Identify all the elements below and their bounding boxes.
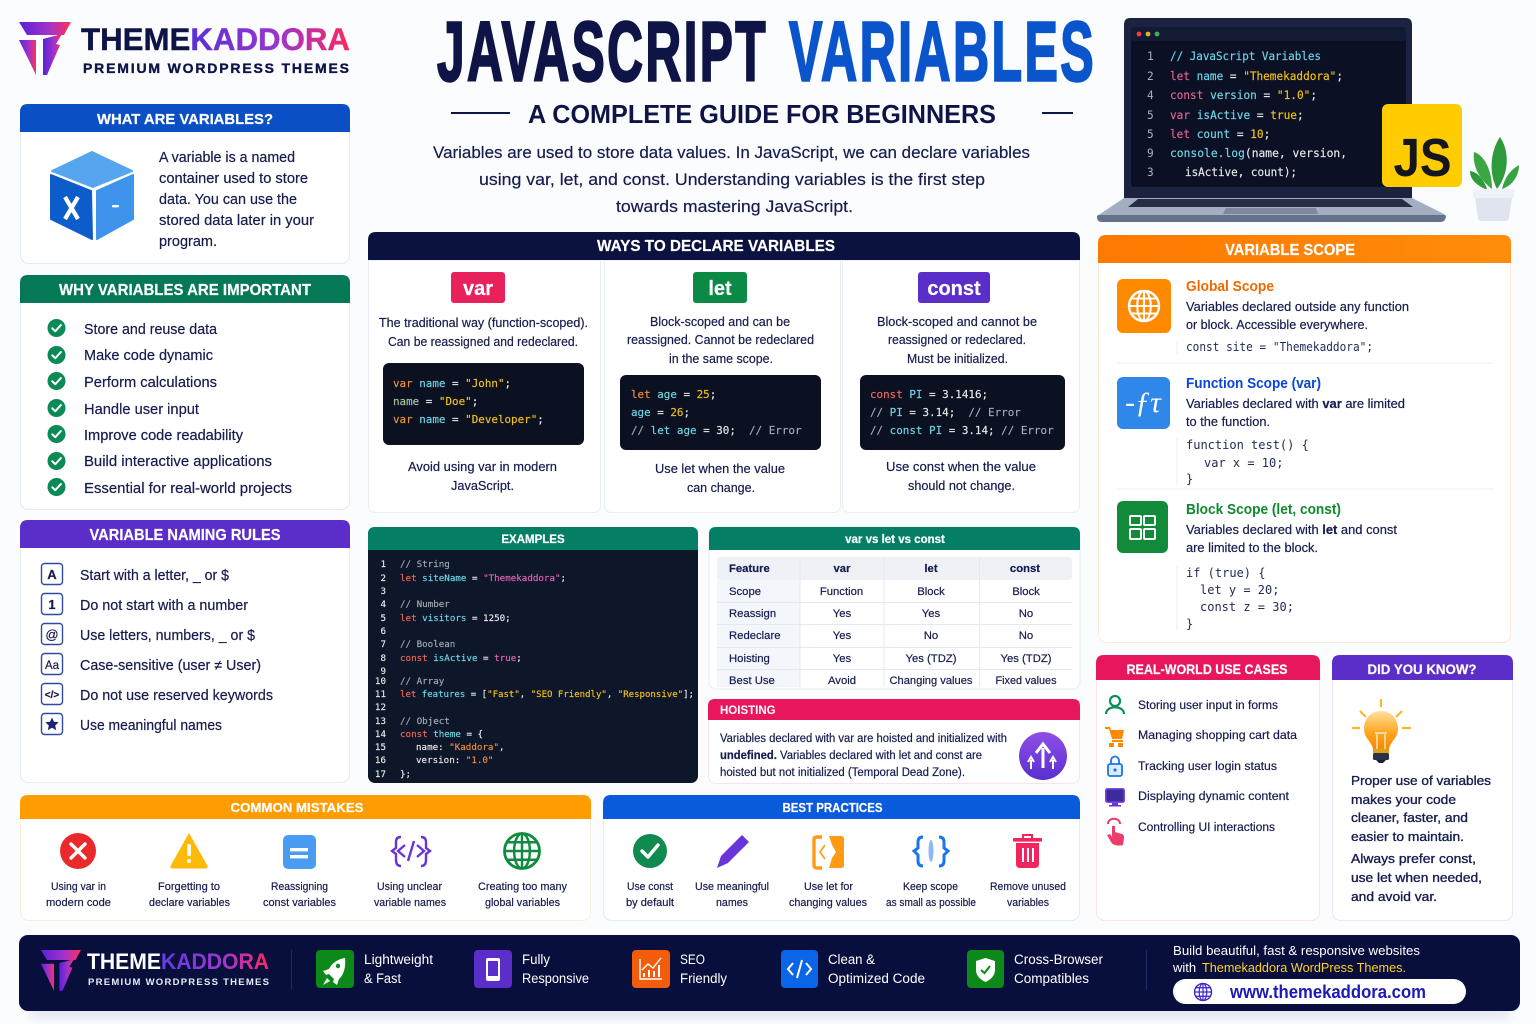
panel: variable scope [1098, 235, 1511, 642]
did you know text: easier to maintain. [1351, 829, 1464, 844]
scope: global [1117, 279, 1409, 354]
examples line numbers: 5 [380, 613, 386, 624]
comparison table: const [1010, 563, 1040, 575]
icon: user [1106, 696, 1124, 714]
scope: block: let y = 20; [1200, 583, 1279, 597]
examples code: name: "Kaddora", [416, 742, 505, 753]
code block: let: // let age = 30; // Error [631, 424, 802, 437]
did you know text: cleaner, faster, and [1351, 810, 1468, 825]
common mistakes labels: Using var in [51, 881, 106, 893]
scope: global: Global Scope [1186, 279, 1274, 295]
hoisting text: hoisted but not initialized (Temporal Dead Zone). [720, 767, 965, 779]
examples line numbers: 10 [375, 676, 386, 687]
logo wordmark: THEMEKADDORA [81, 21, 350, 57]
card: let [604, 260, 840, 512]
examples line numbers: 3 [380, 586, 386, 597]
heading: real-world use cases: REAL-WORLD USE CASES [1126, 661, 1288, 677]
scope: function: var x = 10; [1204, 456, 1283, 470]
examples line numbers: 13 [375, 716, 386, 727]
website pill [1173, 979, 1466, 1004]
scope: function: Variables declared with var are limited [1186, 396, 1405, 411]
icon: variable cube [51, 152, 133, 239]
icon: monitor [1106, 789, 1124, 806]
code block: const [860, 375, 1065, 450]
naming rule list: Do not start with a number [80, 598, 248, 614]
naming rule icons [42, 564, 62, 734]
did you know text [1351, 773, 1491, 904]
use case list: Controlling UI interactions [1138, 820, 1275, 834]
icon: red x [60, 833, 96, 869]
heading: best practices: BEST PRACTICES [782, 800, 883, 815]
best practices labels: as small as possible [886, 897, 976, 909]
feature: fully responsive [474, 950, 589, 988]
code block: var: name = "Doe"; [393, 395, 478, 408]
feature: clean code: Clean & [828, 952, 875, 967]
panel: what are variables [20, 104, 350, 264]
laptop code text: 5 [1147, 109, 1154, 122]
examples code: let features = ["Fast", "SEO Friendly", "Responsive"]; [400, 689, 694, 700]
scope: global: or block. Accessible everywhere. [1186, 317, 1368, 332]
card: var: JavaScript. [451, 478, 514, 493]
comparison table: Yes [833, 608, 852, 620]
footer banner [19, 935, 1520, 1011]
panel: common mistakes [20, 795, 591, 920]
icon: trash can [1013, 835, 1042, 868]
panel: ways to declare variables [368, 232, 1080, 512]
feature: lightweight and fast: & Fast [364, 971, 401, 986]
comparison table: var [834, 563, 851, 575]
card: let: can change. [687, 480, 755, 495]
scope: block: if (true) { [1186, 566, 1265, 580]
icon: equals square [283, 835, 316, 869]
definition text: stored data later in your [159, 213, 314, 229]
laptop illustration with code [1097, 18, 1446, 222]
examples line numbers: 1 [380, 559, 386, 570]
card: let: let [708, 278, 732, 300]
icon: lock [1108, 756, 1122, 776]
comparison table: Reassign [729, 608, 776, 620]
code block: var: var name = "John"; [393, 377, 511, 390]
icon: orange code file [814, 836, 844, 868]
heading: did you know [1332, 655, 1513, 680]
laptop code text: console.log(name, version, [1170, 147, 1347, 160]
comparison table: Yes [833, 630, 852, 642]
scope: block: are limited to the block. [1186, 540, 1318, 555]
did you know text: use let when needed, [1351, 870, 1482, 885]
code block: let: let age = 25; [631, 388, 716, 401]
best practices labels: names [716, 897, 748, 909]
card: var: Can be reassigned and redeclared. [388, 334, 578, 349]
scope: function: Function Scope (var) [1186, 376, 1321, 392]
call to action: Themekaddora WordPress Themes. [1202, 960, 1406, 975]
naming rule icon glyphs: A [47, 567, 57, 582]
heading: why variables are important [20, 275, 350, 303]
comparison table: Block [1012, 586, 1040, 598]
naming rule list: Do not use reserved keywords [80, 688, 273, 704]
examples line numbers: 7 [380, 639, 386, 650]
card: let: in the same scope. [669, 351, 773, 366]
heading: variable naming rules [20, 520, 350, 548]
feature: fully responsive: Responsive [522, 971, 589, 986]
feature: fully responsive: Fully [522, 952, 550, 967]
examples code: // Array [400, 676, 445, 687]
examples code: // Number [400, 599, 450, 610]
panel: did you know [1332, 655, 1513, 920]
icon: hoisting arrows [1019, 732, 1067, 780]
intro paragraph [433, 143, 1030, 216]
code block: const: const PI = 3.1416; [870, 388, 988, 401]
heading: what are variables [20, 104, 350, 132]
best practices labels [626, 881, 1066, 909]
heading: examples [368, 527, 698, 550]
did you know text: Proper use of variables [1351, 773, 1491, 788]
code block: var [383, 363, 584, 445]
feature: clean code: Optimized Code [828, 971, 925, 986]
comparison table: No [1019, 630, 1033, 642]
naming rule list [80, 568, 273, 734]
scope: global: const site = "Themekaddora"; [1186, 340, 1373, 354]
scope: function: function test() { [1186, 438, 1309, 452]
naming rule list: Start with a letter, _ or $ [80, 568, 229, 584]
best practices labels: Use const [627, 881, 674, 893]
naming rule icon glyphs [45, 567, 60, 701]
feature: cross-browser: Compatibles [1014, 971, 1089, 986]
checklist: Improve code readability [84, 428, 244, 444]
intro paragraph: using var, let, and const. Understanding variables is the first step [479, 170, 985, 189]
icon: pencil [717, 835, 749, 868]
laptop code text: isActive, count); [1185, 166, 1297, 179]
definition text: data. You can use the [159, 192, 297, 208]
icon: light bulb [1352, 699, 1411, 763]
naming rule list: Use meaningful names [80, 718, 222, 734]
heading: variable scope: VARIABLE SCOPE [1225, 242, 1355, 259]
examples code: }; [400, 769, 411, 780]
card: const: const [927, 278, 981, 300]
heading: hoisting: HOISTING [720, 705, 776, 717]
card: var: var [463, 278, 493, 300]
best practices labels: by default [626, 897, 675, 909]
examples line numbers: 2 [380, 573, 386, 584]
heading: ways to declare [368, 232, 1080, 260]
scope: block [1117, 501, 1397, 631]
scope: function: } [1186, 472, 1193, 486]
best practices labels: Remove unused [990, 881, 1066, 893]
footer logo: PREMIUM WORDPRESS THEMES [88, 977, 269, 988]
logo: Themekaddora header [19, 21, 350, 76]
comparison table: Feature [729, 563, 770, 575]
title: JAVASCRIPT [437, 4, 768, 98]
feature: seo friendly: SEO [680, 952, 705, 967]
card: const [842, 260, 1080, 512]
best practices labels: Use meaningful [695, 881, 769, 893]
common mistakes labels: declare variables [149, 897, 230, 909]
card: var [368, 260, 600, 512]
feature: cross-browser: Cross-Browser [1014, 952, 1103, 967]
scope: block: Block Scope (let, const) [1186, 502, 1341, 518]
common mistakes labels: Reassigning [271, 881, 328, 893]
examples code [400, 559, 694, 780]
icon: warning triangle [171, 834, 207, 868]
naming rule icon glyphs: @ [45, 627, 59, 642]
heading: common mistakes: COMMON MISTAKES [230, 800, 364, 815]
footer logo [41, 949, 269, 991]
code block: const: // const PI = 3.14; // Error [870, 424, 1054, 437]
icon: potted plant [1470, 137, 1519, 221]
examples line numbers: 8 [380, 653, 386, 664]
heading: common mistakes [20, 795, 591, 819]
comparison table: Fixed values [996, 675, 1057, 687]
examples code: // String [400, 559, 450, 570]
heading: what are variables: WHAT ARE VARIABLES? [97, 111, 273, 128]
examples line numbers: 16 [375, 755, 386, 766]
checklist: Handle user input [84, 402, 199, 418]
panel: examples code [368, 527, 698, 783]
heading: comparison: var vs let vs const [845, 534, 945, 546]
laptop code text: 5 [1147, 128, 1154, 141]
examples code: // Object [400, 716, 450, 727]
code block: let: age = 26; [631, 406, 690, 419]
heading: comparison [709, 527, 1080, 550]
comparison table: No [1019, 608, 1033, 620]
laptop code text: const version = "1.0"; [1170, 89, 1317, 102]
laptop code text: 2 [1147, 70, 1154, 83]
heading: best practices [603, 795, 1080, 819]
heading: variable naming rules: VARIABLE NAMING RULES [90, 527, 280, 544]
checklist [48, 319, 292, 497]
card: let: Use let when the value [655, 461, 785, 476]
laptop code text: let count = 10; [1170, 128, 1270, 141]
heading: why variables are important: WHY VARIABLES ARE IMPORTANT [59, 282, 312, 299]
checklist: Build interactive applications [84, 454, 272, 470]
call to action: with [1172, 960, 1196, 975]
common mistakes labels: modern code [46, 897, 111, 909]
icon: green globe [504, 834, 540, 868]
comparison table: Yes [922, 608, 941, 620]
examples line numbers: 9 [380, 666, 386, 677]
icon: shopping cart [1105, 727, 1124, 747]
feature: clean code [781, 950, 925, 988]
definition text: program. [159, 234, 217, 250]
definition text [159, 150, 314, 250]
call to action: Build beautiful, fast & responsive websites [1173, 943, 1420, 958]
comparison table [717, 557, 1072, 687]
title: VARIABLES [789, 4, 1096, 98]
common mistakes labels: Creating too many [478, 881, 567, 893]
best practices labels: changing values [789, 897, 867, 909]
card: let: reassigned. Cannot be redeclared [627, 332, 814, 347]
heading: did you know: DID YOU KNOW? [1368, 661, 1476, 677]
definition text: A variable is a named [159, 150, 295, 166]
naming rule icon glyphs: 1 [48, 597, 56, 612]
icon: curly braces [914, 837, 948, 866]
icon: JS badge [1382, 104, 1462, 188]
laptop code text [1147, 50, 1347, 179]
comparison table: let [924, 563, 938, 575]
heading: variable scope [1098, 235, 1511, 263]
examples code: // Boolean [400, 639, 455, 650]
card: const: Block-scoped and cannot be [877, 314, 1037, 329]
scope: global: Variables declared outside any function [1186, 299, 1409, 314]
examples code: version: "1.0" [416, 755, 493, 766]
code block: let [620, 375, 821, 450]
did you know text: makes your code [1351, 792, 1456, 807]
laptop code text: // JavaScript Variables [1170, 50, 1321, 63]
code block: const: // PI = 3.14; // Error [870, 406, 1021, 419]
comparison table: Yes [833, 653, 852, 665]
panel: best practices [603, 795, 1080, 920]
panel: hoisting [708, 699, 1080, 784]
call to action [1172, 943, 1466, 1004]
checklist: Store and reuse data [84, 322, 217, 338]
laptop code text: var isActive = true; [1170, 109, 1304, 122]
card: const: Use const when the value [886, 459, 1036, 474]
icon: JS badge: JS [1394, 128, 1452, 188]
checklist: Make code dynamic [84, 348, 213, 364]
naming rule list: Use letters, numbers, _ or $ [80, 628, 255, 644]
feature: seo friendly [632, 950, 727, 988]
laptop code text: 3 [1147, 166, 1154, 179]
card: var: Avoid using var in modern [408, 459, 557, 474]
panel: var vs let vs const table [709, 527, 1080, 689]
heading: hoisting [708, 699, 1080, 720]
panel: variable naming rules [20, 520, 350, 782]
best practices labels: Keep scope [903, 881, 958, 893]
best practices labels: variables [1007, 897, 1049, 909]
card: var: The traditional way (function-scoped). [379, 315, 588, 330]
laptop code text: 4 [1147, 89, 1154, 102]
examples line numbers [375, 559, 386, 780]
use case list [1138, 698, 1297, 834]
scope: function: -ƒτ [1125, 386, 1162, 419]
scope: function: to the function. [1186, 414, 1270, 429]
use case list: Managing shopping cart data [1138, 728, 1297, 742]
feature: cross-browser [967, 950, 1103, 988]
naming rule list: Case-sensitive (user ≠ User) [80, 658, 261, 674]
comparison table: Changing values [890, 675, 973, 687]
heading: ways to declare: WAYS TO DECLARE VARIABLES [597, 238, 835, 255]
common mistakes labels: variable names [374, 897, 446, 909]
examples line numbers: 15 [375, 742, 386, 753]
panel: real-world use cases [1096, 655, 1320, 920]
did you know text: and avoid var. [1351, 889, 1437, 904]
comparison table: No [924, 630, 938, 642]
hoisting text [720, 733, 1007, 779]
common mistakes labels: Forgetting to [158, 881, 220, 893]
comparison table: Yes (TDZ) [905, 653, 957, 665]
card: const: reassigned or redeclared. [888, 332, 1026, 347]
examples line numbers: 4 [380, 599, 386, 610]
heading: real-world use cases [1096, 655, 1320, 680]
logo icon [19, 22, 71, 75]
examples line numbers: 17 [375, 769, 386, 780]
footer logo: THEMEKADDORA [87, 949, 269, 974]
best practices labels: Use let for [804, 881, 853, 893]
hoisting text: Variables declared with var are hoisted and initialized with [720, 733, 1007, 745]
logo tagline: PREMIUM WORDPRESS THEMES [83, 60, 349, 76]
icon: pointer hand [1107, 819, 1124, 846]
intro paragraph: Variables are used to store data values. In JavaScript, we can declare variables [433, 143, 1030, 162]
definition text: container used to store [159, 171, 308, 187]
laptop code text: 1 [1147, 50, 1154, 63]
icon: green check [633, 834, 667, 868]
checklist: Perform calculations [84, 375, 217, 391]
scope: block: } [1186, 617, 1193, 631]
feature: lightweight and fast: Lightweight [364, 952, 433, 967]
scope: function [1117, 376, 1405, 486]
card: const: should not change. [908, 478, 1015, 493]
naming rule icon glyphs: Aa [45, 660, 60, 672]
feature: lightweight and fast [316, 950, 433, 988]
comparison table: Avoid [828, 675, 856, 687]
common mistakes labels: global variables [485, 897, 560, 909]
comparison table: Hoisting [729, 653, 770, 665]
scope: block: Variables declared with let and const [1186, 522, 1397, 537]
intro paragraph: towards mastering JavaScript. [616, 197, 853, 216]
comparison table: Block [917, 586, 945, 598]
naming rule icon glyphs: </> [45, 690, 59, 701]
examples line numbers: 6 [380, 626, 386, 637]
common mistakes labels: const variables [263, 897, 336, 909]
examples code: let visitors = 1250; [400, 613, 511, 624]
examples line numbers: 14 [375, 729, 386, 740]
heading: examples: EXAMPLES [501, 534, 565, 546]
subtitle: A COMPLETE GUIDE FOR BEGINNERS [528, 99, 996, 129]
common mistakes labels [46, 881, 567, 909]
use case list: Displaying dynamic content [1138, 789, 1290, 803]
icon: code brackets [392, 837, 430, 866]
hoisting text: undefined. Variables declared with let and const are [720, 750, 982, 762]
website pill: www.themekaddora.com [1229, 982, 1426, 1002]
examples line numbers: 11 [375, 689, 386, 700]
card: let: Block-scoped and can be [650, 314, 790, 329]
scope: block: const z = 30; [1200, 600, 1294, 614]
examples code: let siteName = "Themekaddora"; [400, 573, 566, 584]
comparison table: Yes (TDZ) [1000, 653, 1052, 665]
use case list: Tracking user login status [1138, 759, 1277, 773]
examples code: const isActive = true; [400, 653, 522, 664]
checklist: Essential for real-world projects [84, 481, 292, 497]
panel: why variables are important [20, 275, 350, 510]
comparison table: Best Use [729, 675, 775, 687]
examples line numbers: 12 [375, 702, 386, 713]
code block: var: var name = "Developer"; [393, 413, 544, 426]
examples code: const theme = { [400, 729, 483, 740]
comparison table: Redeclare [729, 630, 780, 642]
common mistakes labels: Using unclear [377, 881, 442, 893]
use case list: Storing user input in forms [1138, 698, 1278, 712]
laptop code text: 9 [1147, 147, 1154, 160]
feature: seo friendly: Friendly [680, 971, 727, 986]
comparison table: Scope [729, 586, 761, 598]
did you know text: Always prefer const, [1351, 851, 1476, 866]
laptop code text: let name = "Themekaddora"; [1170, 70, 1343, 83]
comparison table: Function [820, 586, 863, 598]
card: const: Must be initialized. [907, 351, 1008, 366]
